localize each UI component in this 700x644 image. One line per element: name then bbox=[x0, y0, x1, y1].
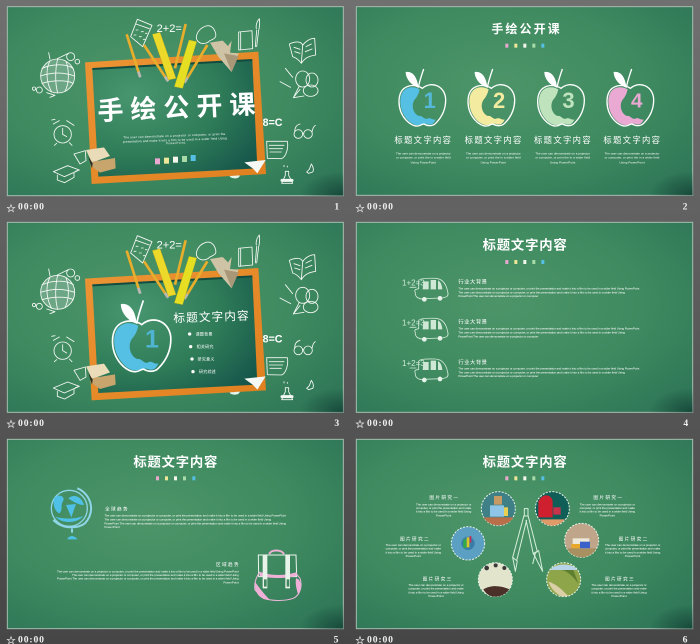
slide 3 footer: 3 bbox=[334, 418, 339, 429]
label right 1: 图片研究一 bbox=[593, 494, 622, 501]
slide 1 footer: 00:00 bbox=[18, 202, 44, 213]
bus row 2: The user can demonstrate on a projector or computer, or print the presentation and make it into a film to be used in a wider field Using PowerPoint bbox=[458, 326, 639, 330]
slide 1 background bbox=[7, 7, 343, 196]
cover colour dots bbox=[155, 155, 196, 164]
label left 3: 图片研究三 bbox=[423, 575, 452, 582]
slide 3 frame bbox=[85, 268, 266, 400]
slide 4 title: 标题文字内容 bbox=[483, 237, 567, 253]
label left 2: 图片研究二 bbox=[400, 535, 429, 542]
cover description: The user can demonstrate on a projector or computer, or print the bbox=[123, 132, 226, 139]
slide 3 pencils and books bbox=[86, 240, 266, 395]
slide 1 footer bbox=[7, 202, 339, 213]
caption 3: The user can demonstrate on a projector bbox=[535, 152, 590, 156]
bullet list bbox=[188, 330, 216, 374]
label right 2: it into a film to be used in a wider field Using bbox=[605, 550, 661, 554]
globe text block: The user can demonstrate on a projector or computer, or print the presentation and make it into a film to be used in a wider field Using PowerPoint bbox=[104, 514, 286, 518]
chalk doodles around the board bbox=[32, 19, 318, 183]
globe text block: 全球趋势 bbox=[105, 505, 128, 512]
bus row 3: The user can demonstrate on a projector or computer, or print the presentation and make it into a film to be used in a wider field Using PowerPoint bbox=[458, 367, 639, 371]
label left 2: computer, or print the presentation and make bbox=[386, 547, 441, 551]
bullet list: 研究综述 bbox=[199, 368, 216, 374]
label left 2: it into a film to be used in a wider field Using bbox=[386, 550, 441, 554]
bus row 1: The user can demonstrate on a projector or computer, or print the presentation and make it into a film to be used in a wider field Using bbox=[458, 290, 625, 294]
cover title: 手绘公开课 bbox=[97, 89, 256, 126]
label left 3 bbox=[408, 575, 464, 598]
label left 1: PowerPoint bbox=[436, 513, 451, 517]
caption 4: The user can demonstrate on a projector bbox=[605, 152, 659, 156]
slide 3 background bbox=[7, 222, 343, 412]
bus row 3 bbox=[402, 358, 639, 382]
apple 1 bbox=[399, 69, 446, 126]
apple 3: 3 bbox=[562, 88, 575, 113]
label left 3: PowerPoint bbox=[428, 594, 444, 598]
label right 3 bbox=[591, 575, 647, 598]
bullet list: 研究意义 bbox=[198, 355, 214, 361]
caption 4: Using PowerPoint bbox=[619, 161, 645, 165]
caption 4: 标题文字内容 bbox=[603, 135, 660, 145]
caption 3: 标题文字内容 bbox=[534, 135, 591, 145]
caption 2: The user can demonstrate on a projector bbox=[466, 152, 521, 156]
label left 1 bbox=[416, 494, 472, 517]
slide 5: globe and backpack bbox=[7, 439, 343, 644]
label right 1: The user can demonstrate on a projector or bbox=[580, 502, 635, 506]
backpack text block: The user can demonstrate on a projector or computer, or print the presentation and make it into a film to be used in a wider field Using bbox=[72, 573, 239, 577]
apple 2: 2 bbox=[493, 88, 505, 113]
slide 1: cover bbox=[7, 7, 343, 213]
label right 3: 图片研究三 bbox=[605, 575, 634, 582]
cover description bbox=[123, 132, 227, 147]
caption 1: 标题文字内容 bbox=[394, 135, 451, 145]
caption 3: or computer, or print the in a wider field bbox=[535, 156, 590, 160]
slide 5 footer bbox=[7, 634, 339, 644]
bus row 2 bbox=[402, 317, 639, 342]
bus row 1: The user can demonstrate on a projector or computer, or print the presentation and make it into a film to be used in a wider field Using PowerPoint bbox=[458, 287, 639, 291]
large blue apple: 1 bbox=[145, 325, 159, 354]
slide 2 footer: 2 bbox=[683, 202, 688, 213]
slide 4 footer: 4 bbox=[683, 418, 688, 429]
label right 3: The user can demonstrate on a projector or bbox=[591, 583, 647, 587]
label right 3: it into a film to be used in a wider field Using bbox=[591, 590, 647, 594]
bus row 3: PowerPoint The user can demonstrate on a projector or computer bbox=[458, 374, 538, 378]
label right 3: computer, or print the presentation and make bbox=[591, 587, 647, 591]
slide 5 background bbox=[7, 439, 343, 629]
icon: globe bbox=[51, 488, 91, 539]
caption 2: Using PowerPoint bbox=[481, 161, 506, 165]
label right 2: 图片研究二 bbox=[619, 535, 648, 542]
slide 3 footer bbox=[7, 418, 339, 429]
orange chalkboard frame bbox=[85, 52, 266, 184]
label right 1: PowerPoint bbox=[600, 513, 615, 517]
label right 2 bbox=[605, 535, 661, 558]
large blue apple bbox=[112, 300, 171, 372]
label right 1: it into a film to be used in a wider field Using bbox=[580, 510, 635, 514]
globe text block: The user can demonstrate on a projector or computer, or print the presentation and make it into a film to be used in a wider field Using bbox=[104, 517, 271, 521]
photo 6 bbox=[547, 563, 581, 597]
photo 4 bbox=[565, 523, 599, 557]
slide 6 title: 标题文字内容 bbox=[483, 453, 567, 469]
slide 2 title: 手绘公开课 bbox=[491, 21, 560, 36]
label right 3: PowerPoint bbox=[611, 594, 627, 598]
label right 2: PowerPoint bbox=[625, 554, 640, 558]
caption 1: or computer, or print the in a wider field bbox=[396, 156, 451, 160]
label left 1: 图片研究一 bbox=[429, 494, 458, 501]
caption 2: 标题文字内容 bbox=[465, 135, 521, 145]
label right 1: computer, or print the presentation and make bbox=[580, 506, 635, 510]
bus row 2: 行业大背景 bbox=[458, 317, 487, 325]
slide 3 footer: 00:00 bbox=[18, 418, 44, 429]
slide 4 footer bbox=[356, 418, 688, 429]
photo 1 bbox=[481, 492, 515, 526]
label left 2: The user can demonstrate on a projector or bbox=[386, 543, 441, 547]
caption 2 bbox=[465, 135, 521, 165]
backpack text block: PowerPoint The user can demonstrate on a projector or computer, or print the presentation and make it into a film to be used in a wider field Using bbox=[57, 577, 239, 581]
photo 2 bbox=[535, 492, 569, 526]
label left 3: computer, or print the presentation and make bbox=[408, 587, 464, 591]
bus row 2: The user can demonstrate on a projector or computer, or print the presentation and make it into a film to be used in a wider field Using bbox=[458, 330, 625, 334]
slide 2: four apples bbox=[356, 7, 693, 213]
caption 3: Using PowerPoint bbox=[550, 161, 575, 165]
caption 4: or computer, or print the in a wider field bbox=[605, 156, 660, 160]
slide 2 background bbox=[356, 7, 693, 195]
bus row 1 bbox=[402, 278, 639, 302]
slide 2 footer bbox=[356, 202, 688, 213]
cover description: presentation and make it into a film to be used in a wider field Using bbox=[123, 136, 227, 144]
slide 3 heading: 标题文字内容 bbox=[173, 309, 249, 325]
slide 1 footer: 1 bbox=[334, 202, 339, 213]
globe text block: PowerPoint The user can demonstrate on a projector or computer, or print the presentation and make it into a film to be used in a wider field Using bbox=[104, 521, 286, 525]
slide 2 footer: 00:00 bbox=[367, 202, 393, 213]
label left 1: computer, or print the presentation and make bbox=[416, 506, 472, 510]
globe text block: PowerPoint bbox=[104, 525, 120, 529]
caption 1: Using PowerPoint bbox=[411, 161, 436, 165]
icon: backpack bbox=[255, 550, 301, 600]
label left 3: it into a film to be used in a wider field Using bbox=[408, 590, 464, 594]
slide 6: photos around compass bbox=[356, 439, 693, 644]
label left 2: PowerPoint bbox=[406, 554, 421, 558]
backpack text block: PowerPoint bbox=[223, 581, 239, 585]
slide 4 background bbox=[356, 222, 693, 412]
slide 6 background bbox=[356, 439, 693, 629]
bus row 3: The user can demonstrate on a projector or computer, or print the presentation and make it into a film to be used in a wider field Using bbox=[458, 370, 625, 374]
label right 2: computer, or print the presentation and make bbox=[605, 547, 661, 551]
apple 4 bbox=[607, 69, 654, 126]
label right 1 bbox=[580, 494, 635, 517]
apple 4: 4 bbox=[631, 89, 643, 112]
slide 5 dots bbox=[156, 476, 195, 480]
caption 1 bbox=[394, 135, 451, 165]
cover description: PowerPoint. bbox=[166, 141, 186, 145]
caption 2: or computer, or print the in a wider field bbox=[466, 156, 521, 160]
label left 3: The user can demonstrate on a projector or bbox=[408, 583, 464, 587]
photo 3 bbox=[451, 527, 485, 560]
apple 1: 1 bbox=[424, 88, 436, 113]
backpack text block: 区域趋势 bbox=[216, 561, 239, 568]
bus row 3: 行业大背景 bbox=[458, 358, 487, 366]
icon: compass bbox=[513, 509, 543, 571]
bullet list: 相关研究 bbox=[197, 343, 213, 349]
bus row 1: PowerPoint The user can demonstrate on a projector or computer bbox=[458, 294, 538, 298]
caption 1: The user can demonstrate on a projector bbox=[396, 152, 451, 156]
slide 6 footer bbox=[356, 634, 688, 644]
bus row 1: 行业大背景 bbox=[458, 278, 487, 286]
pencils, rulers and books bbox=[86, 24, 266, 178]
apple 3 bbox=[538, 69, 584, 126]
slide 4: three buses bbox=[356, 222, 693, 429]
slide 3 doodles bbox=[32, 235, 318, 400]
slide 5 title: 标题文字内容 bbox=[133, 453, 217, 469]
backpack text block bbox=[57, 561, 239, 585]
slide 6 dots bbox=[505, 476, 544, 480]
slide 4 dots bbox=[505, 260, 544, 264]
backpack text block: The user can demonstrate on a projector or computer, or print the presentation and make it into a film to be used in a wider field Using PowerPoint bbox=[57, 569, 239, 573]
slide 4 footer: 00:00 bbox=[367, 418, 393, 429]
photo 5 bbox=[478, 563, 512, 597]
caption 4 bbox=[603, 135, 660, 165]
apple 2 bbox=[468, 69, 515, 126]
label right 2: The user can demonstrate on a projector or bbox=[605, 543, 660, 547]
caption 3 bbox=[534, 135, 591, 165]
label left 1: it into a film to be used in a wider field Using bbox=[416, 510, 472, 514]
label left 2 bbox=[386, 535, 441, 558]
label left 1: The user can demonstrate on a projector or bbox=[416, 502, 471, 506]
slide 2 dots bbox=[505, 44, 544, 48]
bullet list: 课题背景 bbox=[196, 330, 212, 336]
slide 3: board with apple bbox=[7, 222, 343, 429]
globe text block bbox=[104, 505, 286, 529]
bus row 2: PowerPoint The user can demonstrate on a projector or computer bbox=[458, 334, 538, 338]
